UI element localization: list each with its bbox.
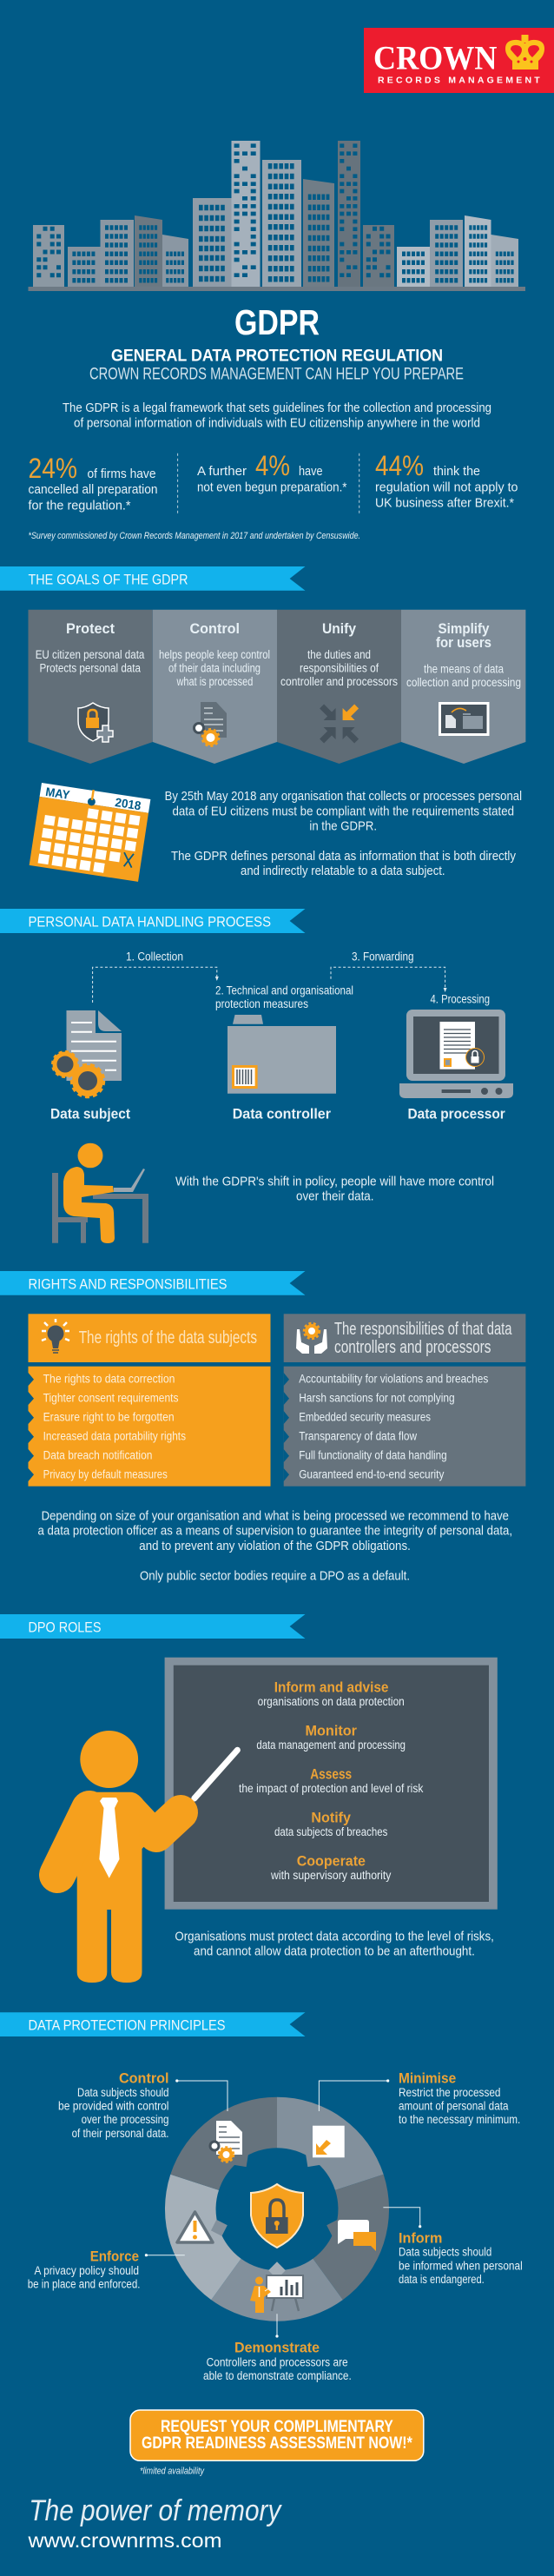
stat: 44 percent: regulation will not apply to <box>375 481 518 495</box>
icon: data processor laptop <box>399 1010 513 1098</box>
call to action button <box>130 2410 424 2460</box>
stat: 4 percent: A further <box>197 465 247 479</box>
tagline: The power of memory <box>29 2494 282 2527</box>
role: assess <box>239 1766 424 1795</box>
icon: shield with lock <box>78 703 113 742</box>
panel: simplify: for users <box>436 635 491 651</box>
callout: demonstrate: able to demonstrate compliance. <box>203 2369 352 2382</box>
principles ring chart <box>165 2097 389 2321</box>
text: DPO recommendation: Only public sector bodies require a DPO as a default. <box>140 1569 410 1583</box>
icon: warning triangle <box>177 2212 213 2242</box>
role: cooperate: with supervisory authority <box>270 1869 392 1882</box>
callout: control: Data subjects should <box>77 2086 168 2099</box>
callout: demonstrate: Controllers and processors are <box>207 2355 348 2368</box>
role: notify <box>274 1810 388 1838</box>
role: cooperate <box>270 1853 392 1882</box>
role: assess: Assess <box>310 1766 352 1782</box>
panel: unify: controller and processors <box>280 675 398 688</box>
icon: light bulb <box>42 1319 69 1353</box>
stat: 44 percent <box>375 450 518 511</box>
callout: enforce: A privacy policy should <box>35 2264 139 2277</box>
role: monitor <box>256 1723 406 1752</box>
text: deadline and definition <box>165 790 522 878</box>
panel: unify: the duties and <box>307 648 371 661</box>
stat: 4 percent: not even begun preparation.* <box>197 481 347 495</box>
text: data protection caption <box>175 1930 494 1959</box>
icon: calendar May 2018 <box>30 782 151 882</box>
intro text <box>63 401 491 430</box>
panel: protect: EU citizen personal data <box>36 648 145 661</box>
process step labels: 3. Forwarding <box>352 950 413 963</box>
section banner: goals <box>0 566 306 591</box>
panel: responsibilities: Transparency of data flow <box>299 1430 417 1443</box>
panel: responsibilities: controllers and processors <box>334 1338 491 1357</box>
icon: document with gears <box>210 2121 242 2162</box>
panel: responsibilities: Embedded security measures <box>299 1411 431 1424</box>
text: deadline and definition: data of EU citizens must be compliant with the requirements stated <box>172 805 514 818</box>
panel: control: helps people keep control <box>159 648 270 661</box>
survey footnote: *Survey commissioned by Crown Records Management in 2017 and undertaken by Censuswide. <box>28 531 360 541</box>
panel: rights of the data subjects <box>28 1314 271 1487</box>
text: deadline and definition: The GDPR defines personal data as information that is both directly <box>171 850 517 864</box>
panel: responsibilities: Full functionality of data handling <box>299 1449 447 1462</box>
icon: data subject document with gears <box>52 1010 122 1096</box>
arrow: forwarding <box>331 967 447 992</box>
callout: minimise: Restrict the processed <box>399 2086 500 2099</box>
role: monitor: Monitor <box>306 1723 358 1738</box>
icon: speech bubbles <box>338 2220 376 2251</box>
section banner: principles: DATA PROTECTION PRINCIPLES <box>28 2017 226 2034</box>
text: deadline and definition: and indirectly relatable to a data subject. <box>241 864 445 878</box>
panel: control: what is processed <box>176 675 253 688</box>
section banner: DPO roles <box>0 1614 306 1639</box>
icon: hands holding gear <box>296 1323 327 1354</box>
callout: demonstrate: Demonstrate <box>234 2340 320 2355</box>
panel: presentation board <box>165 1658 498 1910</box>
text: data protection caption: and cannot allow data protection to be an afterthought. <box>194 1945 475 1959</box>
panel: simplify: collection and processing <box>406 676 521 689</box>
section banner: goals: THE GOALS OF THE GDPR <box>28 572 188 588</box>
callout: control: of their personal data. <box>72 2127 168 2140</box>
text: DPO recommendation: a data protection officer as a means of supervision to guarantee the integrity of personal data, <box>38 1525 512 1539</box>
panel: control: Control <box>189 621 240 637</box>
logo: Crown Records Management: CROWN <box>373 39 497 76</box>
limited availability note: *limited availability <box>140 2466 205 2476</box>
icon: calendar May 2018: MAY <box>44 785 71 802</box>
panel: rights of the data subjects: Increased data portability rights <box>43 1430 186 1443</box>
process step labels: 4. Processing <box>431 993 490 1006</box>
panel: responsibilities <box>284 1314 525 1487</box>
panel: simplify: the means of data <box>424 662 504 675</box>
section banner: handling process: PERSONAL DATA HANDLING PROCESS <box>28 914 271 930</box>
stat: 44 percent: think the <box>433 465 480 479</box>
website url: www.crownrms.com <box>27 2529 222 2552</box>
role: assess: the impact of protection and level of risk <box>239 1782 424 1795</box>
icon: central shield <box>251 2184 303 2248</box>
role: notify: Notify <box>311 1810 352 1825</box>
process step labels <box>126 950 490 1010</box>
role: inform and advise: Inform and advise <box>274 1679 389 1695</box>
callout: inform <box>383 2208 523 2286</box>
stat: 24 percent: 24% <box>28 453 77 484</box>
text: data protection caption: Organisations must protect data according to the level of risks, <box>175 1930 494 1944</box>
text: DPO recommendation: and to prevent any violation of the GDPR obligations. <box>139 1540 411 1553</box>
section banner: principles <box>0 2012 306 2036</box>
logo: Crown Records Management <box>364 28 554 93</box>
arrow: collection <box>93 967 219 1003</box>
panel: rights of the data subjects: Tighter consent requirements <box>43 1392 179 1405</box>
panel: rights of the data subjects: The rights to data correction <box>43 1373 175 1386</box>
skyline illustration <box>28 141 525 291</box>
text: more control <box>175 1175 494 1204</box>
callout: minimise <box>319 2070 520 2126</box>
callout: control: be provided with control <box>58 2100 168 2113</box>
stat: 24 percent: cancelled all preparation <box>28 483 158 497</box>
process step labels: 2. Technical and organisational <box>215 984 353 997</box>
stat: 44 percent: UK business after Brexit.* <box>375 497 514 511</box>
callout: minimise: Minimise <box>399 2070 456 2086</box>
icon: presenter with chart <box>250 2275 303 2313</box>
callout: inform: data is endangered. <box>399 2273 485 2286</box>
role: inform and advise: organisations on data protection <box>258 1695 405 1708</box>
panel: responsibilities: Accountability for violations and breaches <box>299 1373 489 1386</box>
section banner: rights: RIGHTS AND RESPONSIBILITIES <box>28 1275 228 1292</box>
callout: minimise: amount of personal data <box>399 2100 509 2113</box>
panel: rights of the data subjects: Privacy by default measures <box>43 1468 168 1480</box>
callout: demonstrate <box>203 2314 352 2382</box>
callout: control: Control <box>119 2070 168 2086</box>
callout: control <box>58 2070 228 2140</box>
panel: unify: responsibilities of <box>300 662 379 675</box>
text: deadline and definition: By 25th May 2018 any organisation that collects or processes personal <box>165 790 522 804</box>
panel: simplify <box>401 610 525 764</box>
subtitle: general data protection regulation: GENERAL DATA PROTECTION REGULATION <box>111 346 443 365</box>
stat: 4 percent <box>197 450 347 495</box>
role: monitor: data management and processing <box>256 1738 406 1752</box>
callout: inform: be informed when personal <box>399 2259 523 2272</box>
icon: presenter figure with pointer <box>57 1731 237 1983</box>
entity labels <box>50 1106 505 1122</box>
entity labels: Data controller <box>233 1106 332 1122</box>
section banner: rights <box>0 1271 306 1295</box>
panel: protect: Protects personal data <box>40 662 141 675</box>
entity labels: Data processor <box>408 1106 505 1122</box>
text: more control: over their data. <box>296 1190 373 1204</box>
title: GDPR <box>234 302 320 342</box>
callout: inform: Inform <box>399 2230 442 2246</box>
panel: protect: Protect <box>66 621 115 637</box>
stat: 24 percent: for the regulation.* <box>28 500 131 513</box>
panel: control: of their data including <box>168 662 261 675</box>
text: deadline and definition: in the GDPR. <box>309 820 377 834</box>
callout: enforce: Enforce <box>90 2248 139 2264</box>
callout: control: over the processing <box>82 2113 168 2126</box>
panel: responsibilities: Harsh sanctions for not complying <box>299 1392 455 1405</box>
stat: 4 percent: have <box>299 465 323 479</box>
panel: rights of the data subjects: The rights of the data subjects <box>79 1328 257 1348</box>
role: notify: data subjects of breaches <box>274 1825 388 1838</box>
role: inform and advise <box>258 1679 405 1708</box>
process step labels: 1. Collection <box>126 950 183 963</box>
panel: responsibilities: Guaranteed end-to-end security <box>299 1468 445 1480</box>
stat: 4 percent: 4% <box>255 450 290 481</box>
panel: control <box>153 610 277 764</box>
entity labels: Data subject <box>50 1106 130 1122</box>
icon: converging arrows <box>322 706 357 741</box>
stat: 24 percent: of firms have <box>87 467 156 481</box>
role: cooperate: Cooperate <box>297 1853 366 1869</box>
logo: Crown Records Management: RECORDS MANAGEMENT <box>378 76 540 86</box>
text: DPO recommendation <box>38 1509 512 1583</box>
panel: protect <box>28 610 153 764</box>
icon: calendar May 2018: 2018 <box>114 795 142 812</box>
callout: enforce: be in place and enforced. <box>28 2278 141 2291</box>
icon: person at laptop <box>52 1143 148 1243</box>
call to action button: REQUEST YOUR COMPLIMENTARY <box>161 2417 393 2436</box>
icon: document with gears <box>195 702 227 745</box>
panel: unify <box>277 610 401 764</box>
text: DPO recommendation: Depending on size of your organisation and what is being processed we recommend to have <box>42 1509 509 1523</box>
callout: enforce <box>28 2248 185 2291</box>
panel: simplify: Simplify <box>438 621 490 637</box>
icon: file to folder <box>439 704 488 735</box>
stat: 24 percent <box>28 453 158 513</box>
process step labels: protection measures <box>215 997 308 1010</box>
intro text: of personal information of individuals with EU citizenship anywhere in the world <box>74 416 480 430</box>
panel: rights of the data subjects: Data breach notification <box>43 1449 152 1462</box>
text: more control: With the GDPR's shift in policy, people will have more control <box>175 1175 494 1189</box>
stat: 44 percent: 44% <box>375 450 424 481</box>
callout: inform: Data subjects should <box>399 2246 491 2259</box>
icon: minimise page <box>313 2126 345 2157</box>
icon: data controller folder <box>228 1015 336 1094</box>
intro text: The GDPR is a legal framework that sets guidelines for the collection and processing <box>63 401 491 415</box>
icon: gold crown <box>505 35 544 70</box>
call to action button: GDPR READINESS ASSESSMENT NOW!* <box>142 2434 412 2453</box>
callout: minimise: to the necessary minimum. <box>399 2113 520 2126</box>
panel: unify: Unify <box>322 621 357 637</box>
section banner: handling process <box>0 909 306 933</box>
section banner: DPO roles: DPO ROLES <box>28 1619 101 1636</box>
panel: rights of the data subjects: Erasure right to be forgotten <box>43 1411 175 1424</box>
